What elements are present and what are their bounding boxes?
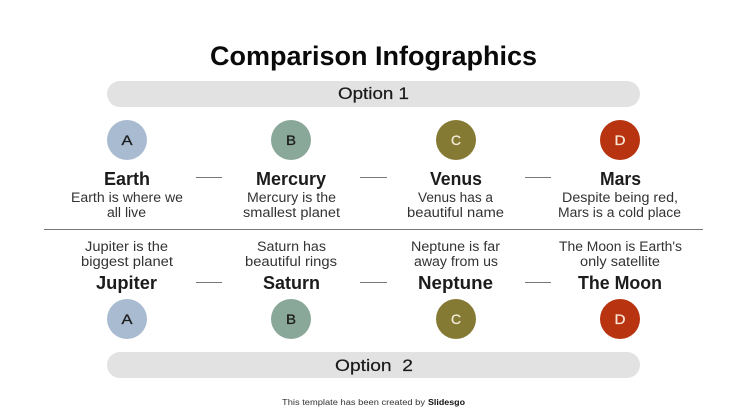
item: The Moon: D [614, 311, 626, 327]
item: Earth: Earth is where we [71, 190, 183, 205]
item: Mercury: smallest planet [243, 205, 340, 220]
item: Mars: D [614, 132, 626, 148]
item: Venus: Venus [430, 169, 482, 189]
item: Jupiter: biggest planet [81, 254, 173, 269]
item: Mars: Mars [600, 169, 641, 189]
item: The Moon: The Moon [578, 273, 662, 293]
item: Jupiter: A [122, 311, 133, 327]
item: Neptune: C [451, 311, 461, 327]
title: Comparison Infographics [210, 41, 537, 71]
item: Earth: all live [107, 205, 146, 220]
item: The Moon: only satellite [580, 254, 660, 269]
item: Venus: beautiful name [407, 205, 504, 220]
option 2 bar [107, 352, 640, 378]
item: Jupiter: Jupiter [96, 273, 157, 293]
item: Jupiter: Jupiter is the [85, 239, 168, 254]
item: Venus: C [451, 132, 461, 148]
item: Mars: Despite being red, [562, 190, 678, 205]
item: Venus: Venus has a [418, 190, 493, 205]
item: Earth: A [122, 132, 133, 148]
item: Saturn: B [286, 311, 296, 327]
footer credit: This template has been created by [282, 398, 425, 407]
item: Neptune: away from us [414, 254, 498, 269]
item: Mars [558, 120, 681, 220]
item: Neptune [411, 239, 501, 339]
item: Neptune: Neptune [418, 273, 493, 293]
item: Venus [407, 120, 504, 220]
item: Saturn: beautiful rings [245, 254, 337, 269]
item: Mercury: B [286, 132, 296, 148]
item: The Moon: The Moon is Earth's [559, 239, 682, 254]
item: Mercury: Mercury is the [247, 190, 336, 205]
option 1 bar [107, 81, 640, 107]
option 2 bar: Option 2 [335, 356, 413, 375]
panel: option 2 items [81, 239, 682, 339]
item: Earth [71, 120, 183, 220]
item: Saturn [245, 239, 337, 339]
footer credit: Slidesgo [428, 398, 465, 407]
footer credit [282, 398, 465, 407]
item: Neptune: Neptune is far [411, 239, 501, 254]
item: The Moon [559, 239, 682, 339]
option 1 bar: Option 1 [338, 84, 409, 103]
item: Mercury: Mercury [256, 169, 326, 189]
connector dashes: option 1 [196, 176, 551, 178]
panel: option 1 items [71, 120, 681, 220]
item: Jupiter [81, 239, 173, 339]
item: Mercury [243, 120, 340, 220]
connector dashes: option 2 [196, 282, 551, 284]
item: Saturn: Saturn [263, 273, 320, 293]
item: Earth: Earth [104, 169, 150, 189]
item: Mars: Mars is a cold place [558, 205, 681, 220]
item: Saturn: Saturn has [257, 239, 326, 254]
